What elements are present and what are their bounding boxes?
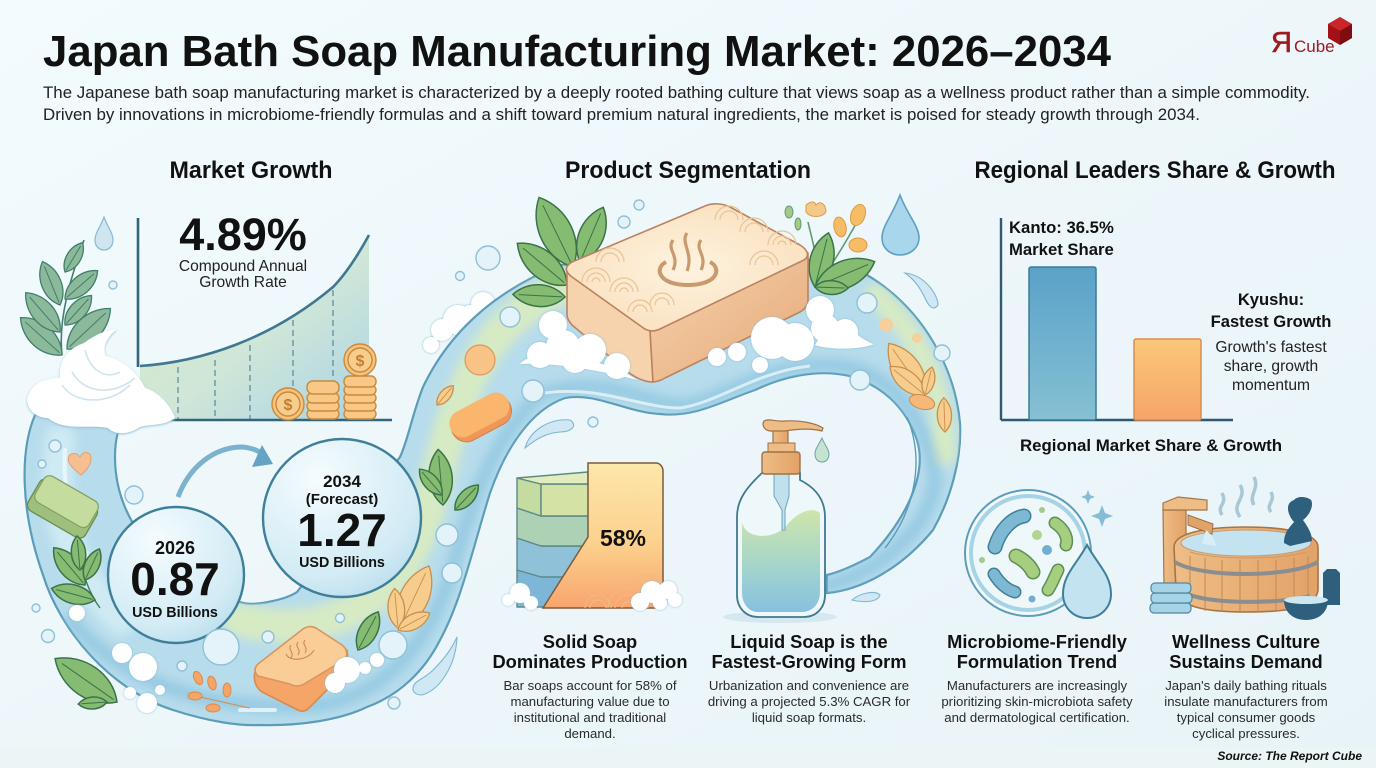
caption: wellness: typical consumer goods [1177, 710, 1316, 725]
caption: solid soap: Dominates Production [492, 651, 688, 672]
label: Kyushu: share, growth [1224, 358, 1318, 375]
caption: wellness: Wellness Culture [1172, 631, 1320, 652]
heart soap [68, 453, 91, 475]
caption: microbiome: and dermatological certification. [944, 710, 1130, 725]
foam at card base [502, 581, 682, 611]
bubble: 2034: 1.27 [297, 504, 387, 556]
intro text: The Japanese bath soap manufacturing market is characterized by a deeply rooted bathing culture that views soap as a wellness product rather than a simple commodity. [43, 84, 1310, 102]
foam swirl [27, 329, 175, 433]
bar: Kanto [1029, 267, 1096, 420]
orange pebbles on ribbon [433, 318, 952, 447]
bubble: 2026 [108, 507, 244, 643]
caption: liquid soap: Liquid Soap is the [730, 631, 888, 652]
intro text [43, 84, 1310, 124]
growth chart [138, 218, 392, 420]
growth chart: $ [284, 397, 293, 414]
label: Kanto: Kanto: 36.5% [1009, 218, 1114, 237]
bar chart: regional [1001, 218, 1331, 455]
icon: large water drop [882, 195, 919, 255]
arrow: growth [178, 445, 273, 497]
caption: liquid soap: Fastest-Growing Form [711, 651, 907, 672]
leaves: ribbon lower [46, 448, 484, 715]
label: Kyushu: Fastest Growth [1211, 312, 1331, 331]
chart area under curve [140, 235, 369, 420]
bubble: 2026: 2026 [155, 538, 195, 558]
orange soap bottom [254, 627, 348, 711]
label: Kanto [1009, 218, 1114, 259]
caption: liquid soap [708, 631, 911, 725]
leaves behind hero soap [509, 190, 880, 308]
label: Kyushu: Growth's fastest [1215, 339, 1327, 356]
caption: solid soap [492, 631, 688, 741]
CAGR stat: Compound Annual [179, 258, 307, 275]
caption: wellness: Sustains Demand [1169, 651, 1323, 672]
caption: solid soap: Bar soaps account for 58% of [503, 678, 677, 693]
headings: Market Growth [170, 157, 332, 184]
soap wave patterns [582, 206, 796, 312]
caption: liquid soap: driving a projected 5.3% CAGR for [708, 694, 911, 709]
leaves: top-left sprig [13, 239, 119, 364]
title: Japan Bath Soap Manufacturing Market: 2026–2034 [43, 27, 1112, 76]
58% label: 58% [600, 525, 646, 551]
growth chart: $ [356, 353, 365, 370]
caption: solid soap: institutional and traditional [514, 710, 666, 725]
label: Kanto: Market Share [1009, 240, 1114, 259]
foam around hero soap [520, 296, 874, 380]
label: Kyushu: momentum [1232, 377, 1310, 394]
caption: microbiome: prioritizing skin-microbiota safety [941, 694, 1133, 709]
caption: solid soap: Solid Soap [543, 631, 637, 652]
CAGR stat: Growth Rate [199, 274, 287, 291]
caption: microbiome: Manufacturers are increasingly [947, 678, 1128, 693]
label: Kyushu [1211, 290, 1331, 394]
caption: liquid soap: Urbanization and convenience are [709, 678, 909, 693]
CAGR stat: 4.89% [179, 209, 307, 260]
caption: solid soap: demand. [564, 726, 616, 741]
icon: liquid soap bottle [723, 420, 837, 623]
CAGR stat [179, 209, 307, 291]
caption: microbiome: Formulation Trend [957, 651, 1117, 672]
bubble: 2034 [263, 439, 421, 597]
bubble: 2034: USD Billions [299, 555, 385, 571]
green soap [25, 472, 103, 541]
caption: microbiome [941, 631, 1133, 725]
icon: microbiome dish [965, 490, 1113, 618]
bubble: 2026: USD Billions [132, 605, 218, 621]
icon: water drop [95, 217, 113, 250]
caption: wellness [1164, 631, 1328, 741]
foam: lower ribbon [69, 605, 384, 713]
bubble: 2034: 2034 [323, 472, 361, 491]
caption: wellness: cyclical pressures. [1192, 726, 1300, 741]
sprig: ribbon left [46, 535, 106, 609]
bar: Kyushu [1134, 339, 1201, 420]
coins [272, 344, 376, 420]
caption: liquid soap: liquid soap formats. [752, 710, 866, 725]
orange sprig [188, 670, 250, 712]
bubble: 2034: (Forecast) [306, 491, 378, 508]
splashes [413, 273, 938, 695]
bubbles [32, 200, 950, 709]
logo: RCube [1271, 17, 1352, 59]
headings: Regional Leaders Share & Growth [974, 157, 1336, 184]
bubble: 2026: 0.87 [130, 553, 220, 605]
icon: soap stack with 58% card [517, 463, 663, 608]
chart caption: Regional Market Share & Growth [1020, 436, 1282, 455]
source note: Source: The Report Cube [1217, 749, 1362, 763]
water ribbon [25, 258, 960, 725]
caption: wellness: Japan's daily bathing rituals [1165, 678, 1327, 693]
intro text: Driven by innovations in microbiome-friendly formulas and a shift toward premium natural ingredients, the market is poised for steady growth through 2034. [43, 106, 1200, 124]
soap onsen symbol [660, 233, 716, 285]
foam: upper left of ribbon [423, 292, 495, 353]
logo: RCube: Я [1271, 27, 1292, 59]
caption: solid soap: manufacturing value due to [510, 694, 670, 709]
logo: RCube: Cube [1294, 37, 1335, 56]
headings [170, 157, 1336, 184]
caption: microbiome: Microbiome-Friendly [947, 631, 1128, 652]
label: Kyushu: Kyushu: [1238, 290, 1304, 309]
hero soap bar [566, 204, 808, 382]
icon: wooden bath tub [1150, 477, 1340, 620]
headings: Product Segmentation [565, 157, 811, 184]
caption: wellness: insulate manufacturers from [1164, 694, 1328, 709]
